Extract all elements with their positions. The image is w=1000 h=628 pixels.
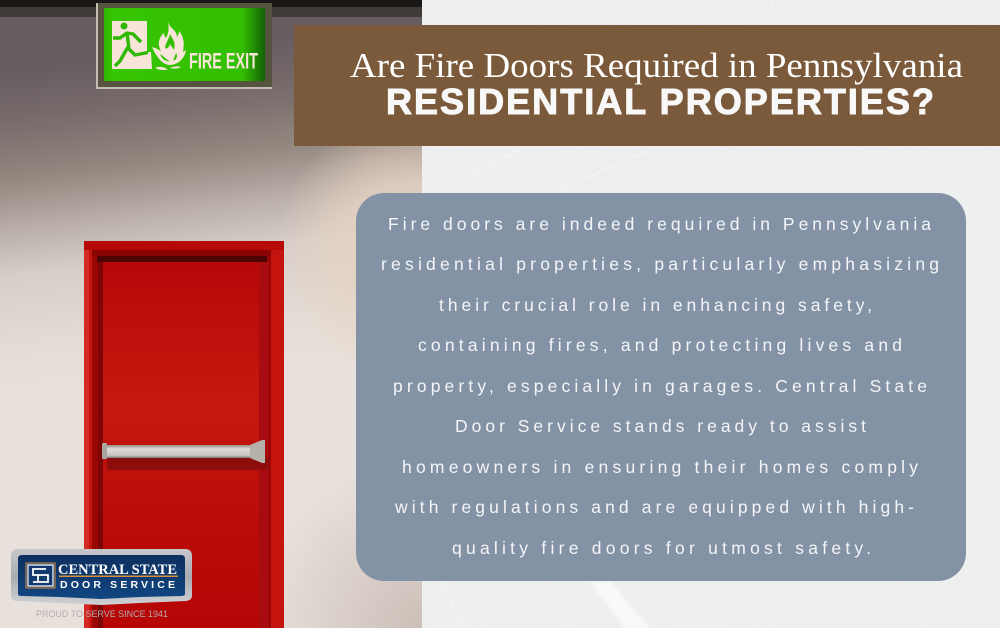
heading line 1: Are Fire Doors Required in Pennsylvania <box>350 46 963 85</box>
ceiling beam <box>0 0 422 17</box>
panel paragraph: Fire doors are indeed required in Pennsylvania <box>388 214 931 234</box>
shadow under push bar <box>107 457 269 470</box>
icon: running person at door <box>112 21 152 69</box>
logo name: CENTRAL STATE <box>58 562 177 578</box>
fire exit sign <box>96 3 272 89</box>
logo plate <box>11 549 192 605</box>
logo tagline: PROUD TO SERVE SINCE 1941 <box>36 609 168 620</box>
panel paragraph: with regulations and are equipped with high- <box>394 497 914 517</box>
title banner <box>294 25 1000 146</box>
panel paragraph: property, especially in garages. Central State <box>393 376 927 396</box>
marble background <box>422 0 1000 628</box>
logo: Central State Door Service <box>11 549 192 620</box>
icon: flame <box>152 22 186 70</box>
logo subtitle: DOOR SERVICE <box>60 579 175 591</box>
push bar <box>102 440 265 463</box>
panel paragraph: their crucial role in enhancing safety, <box>439 295 872 315</box>
sign label: FIRE EXIT <box>189 48 258 74</box>
logo mark <box>26 563 55 588</box>
heading line 2: RESIDENTIAL PROPERTIES? <box>386 81 934 122</box>
panel paragraph: residential properties, particularly emphasizing <box>381 254 939 274</box>
text panel <box>356 193 966 581</box>
panel paragraph: Door Service stands ready to assist <box>455 416 866 436</box>
panel paragraph <box>381 214 939 558</box>
photo: wall with fire door and exit sign <box>0 0 422 628</box>
red fire door <box>84 241 284 628</box>
panel paragraph: containing fires, and protecting lives and <box>418 335 902 355</box>
panel paragraph: homeowners in ensuring their homes comply <box>402 457 918 477</box>
panel paragraph: quality fire doors for utmost safety. <box>452 538 871 558</box>
